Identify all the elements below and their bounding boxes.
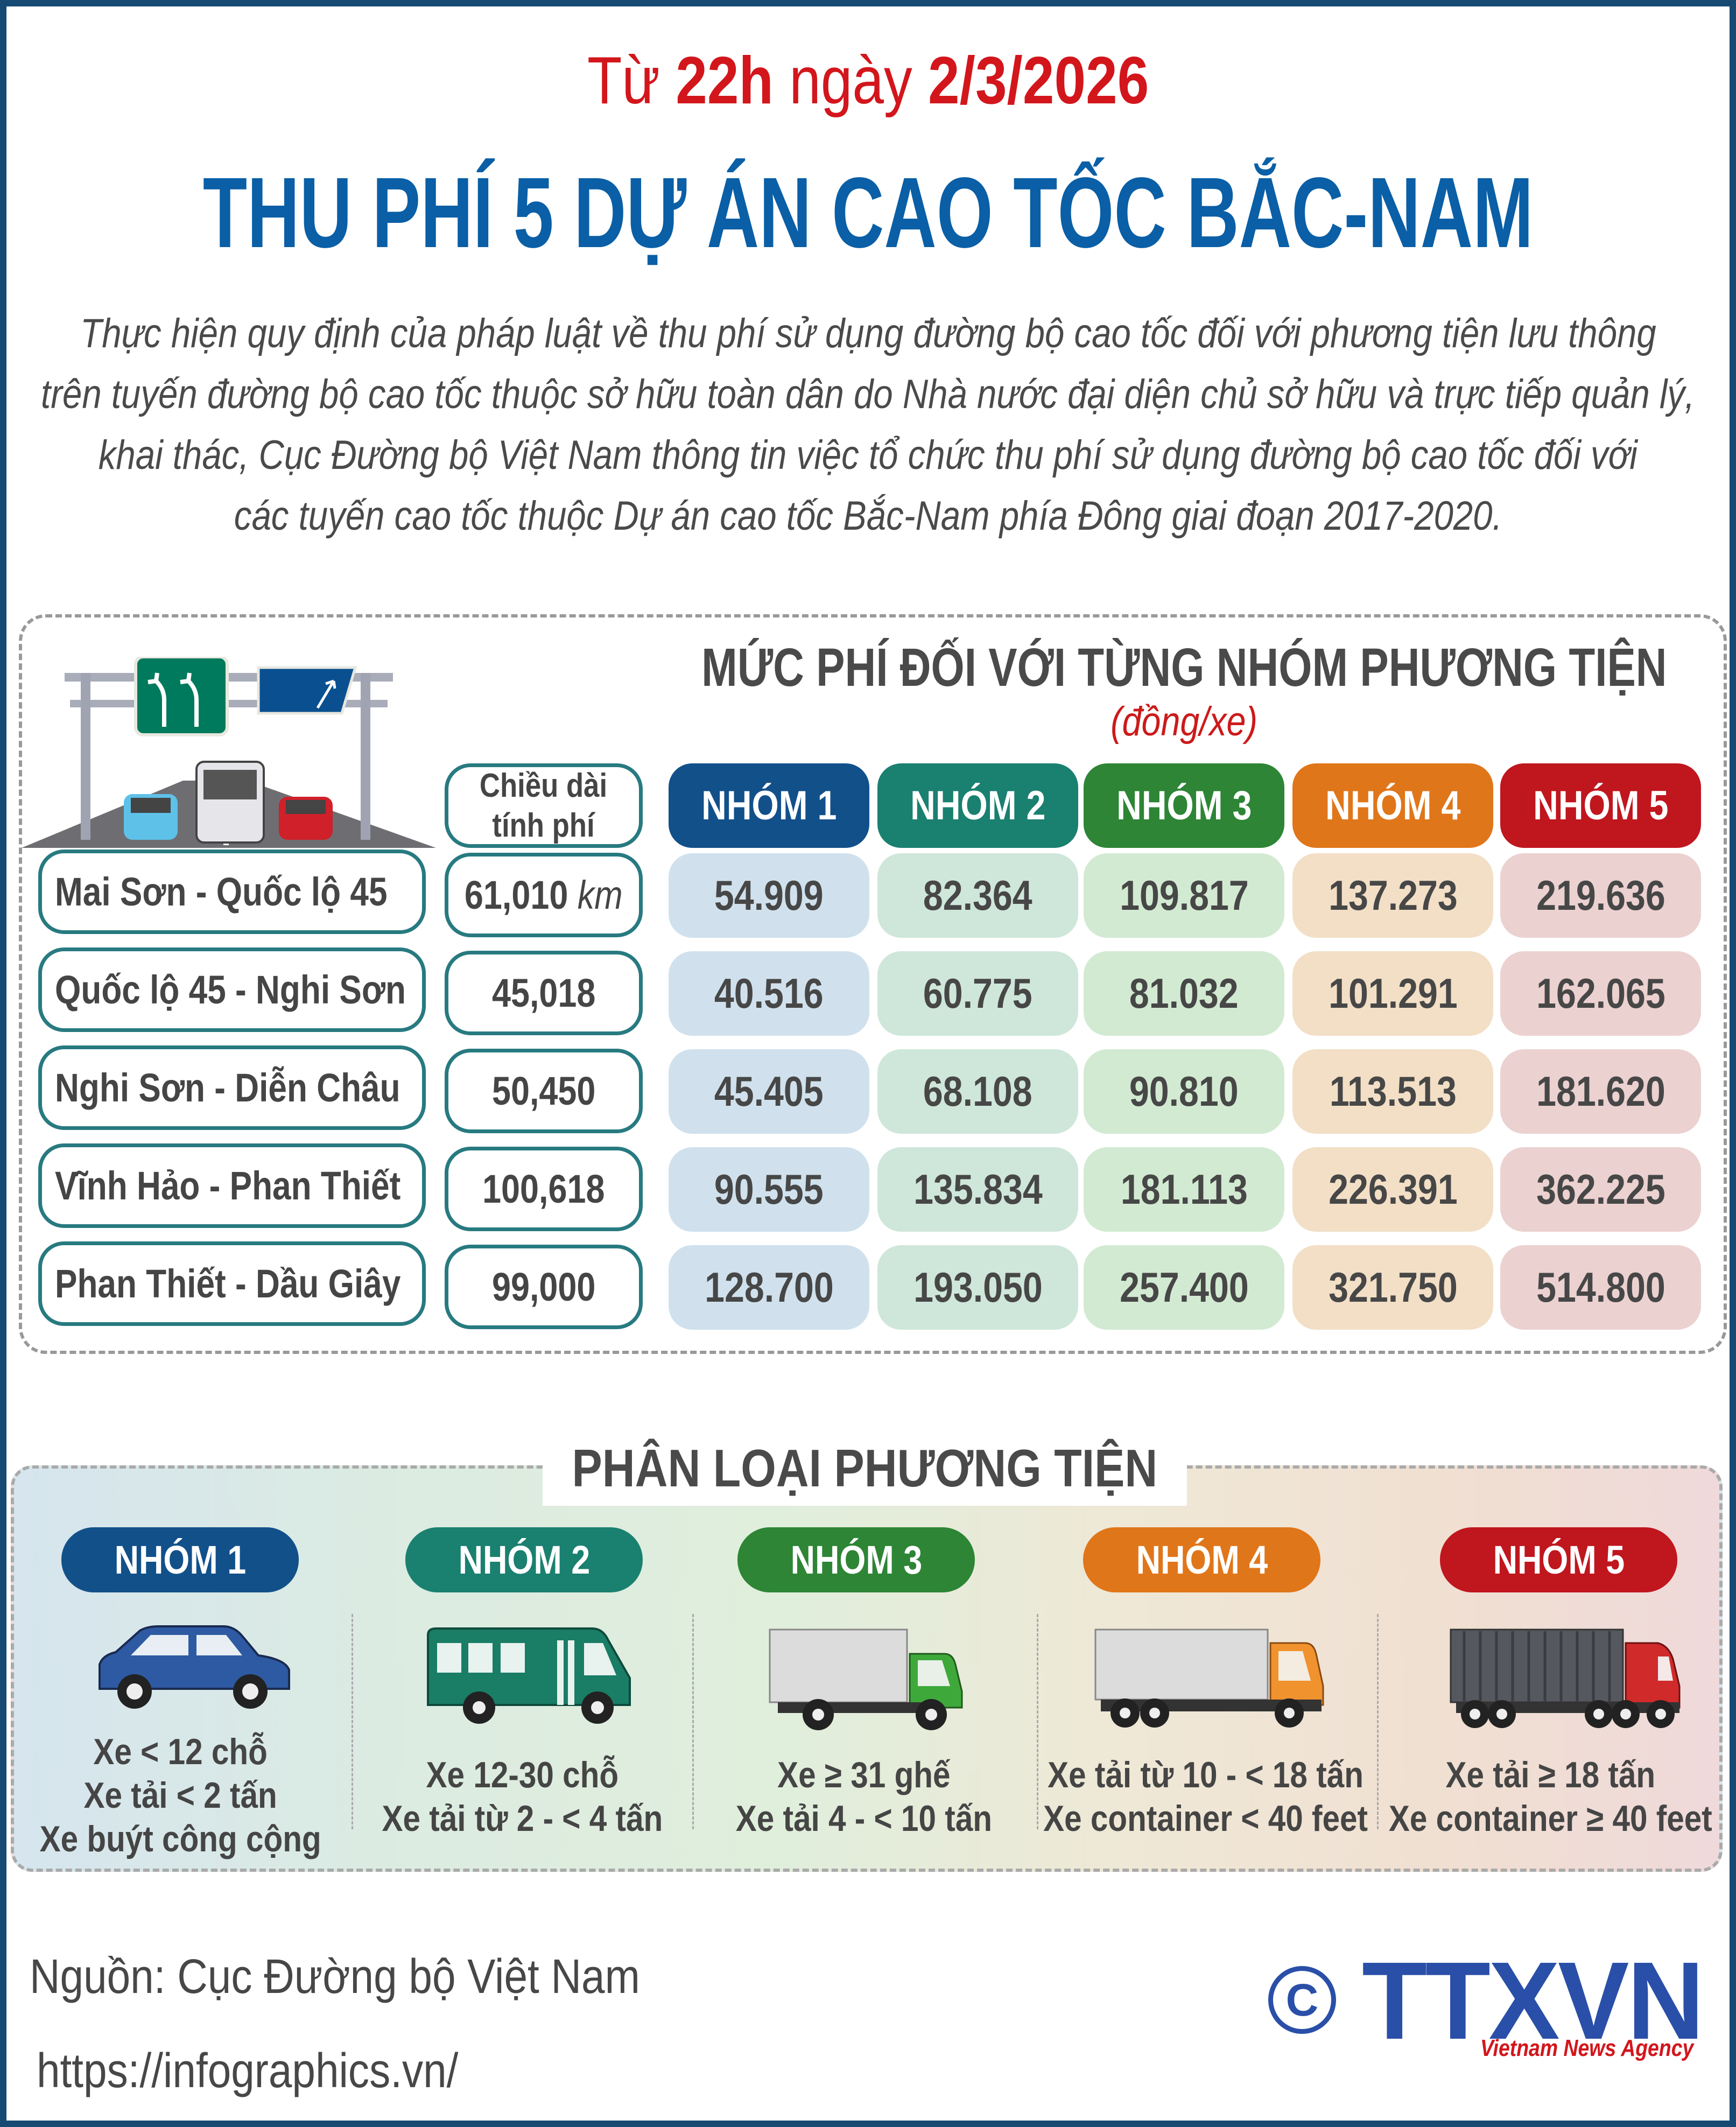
row: Nghi Sơn - Diễn Châu: 50,450	[492, 1069, 595, 1113]
row: Phan Thiết - Dầu Giây: Phan Thiết - Dầu Giây	[55, 1261, 400, 1306]
panel: toll fee table	[19, 614, 1727, 1354]
header: group columns: NHÓM 5	[1533, 783, 1668, 829]
row: Mai Sơn - Quốc lộ 45: 109.817	[1120, 872, 1248, 919]
panel: vehicle classification	[11, 1465, 1723, 1872]
row: Phan Thiết - Dầu Giây: 193.050	[913, 1263, 1042, 1311]
group 4	[1039, 1527, 1373, 1861]
text: group 1 vehicles: Xe tải < 2 tấn	[83, 1775, 277, 1816]
icon: copyright	[1268, 1966, 1336, 2034]
row: Phan Thiết - Dầu Giây: 257.400	[1120, 1263, 1248, 1311]
icon: car	[99, 1625, 290, 1709]
row: Mai Sơn - Quốc lộ 45: Mai Sơn - Quốc lộ 45	[55, 869, 388, 914]
row: Vĩnh Hảo - Phan Thiết: Vĩnh Hảo - Phan Thiết	[55, 1163, 400, 1208]
row: Vĩnh Hảo - Phan Thiết: 100,618	[482, 1167, 605, 1211]
text: group 2 vehicles	[366, 1753, 678, 1841]
intro paragraph	[41, 311, 1695, 539]
row: Phan Thiết - Dầu Giây: 99,000	[492, 1265, 595, 1309]
row: Phan Thiết - Dầu Giây: 514.800	[1536, 1263, 1665, 1311]
row: Quốc lộ 45 - Nghi Sơn: Quốc lộ 45 - Nghi Sơn	[55, 967, 406, 1012]
icon: copyright: C	[1286, 1975, 1318, 2025]
text: group 1 vehicles: Xe < 12 chỗ	[93, 1731, 268, 1772]
text: group 4 vehicles: Xe container < 40 feet	[1044, 1798, 1368, 1839]
header: length: Chiều dài	[480, 767, 608, 804]
icon: highway gantry with cars	[22, 657, 436, 848]
icon: green truck	[767, 1627, 966, 1735]
row: Mai Sơn - Quốc lộ 45	[38, 850, 1701, 938]
row: Nghi Sơn - Diễn Châu: 90.810	[1129, 1068, 1239, 1115]
logo: TTXVN	[1265, 1954, 1706, 2062]
unit note: (đồng/xe)	[1111, 699, 1257, 744]
group 5: NHÓM 5	[1493, 1538, 1625, 1582]
header: group columns: NHÓM 3	[1116, 783, 1252, 829]
icon: container truck	[1448, 1627, 1685, 1735]
row: Vĩnh Hảo - Phan Thiết: 362.225	[1536, 1166, 1665, 1213]
text: group 1 vehicles: Xe buýt công cộng	[39, 1819, 321, 1859]
group 3: NHÓM 3	[790, 1538, 922, 1582]
row: Mai Sơn - Quốc lộ 45: 82.364	[923, 872, 1032, 919]
header: length: tính phí	[493, 806, 595, 844]
row: Phan Thiết - Dầu Giây	[38, 1241, 1701, 1330]
row: Mai Sơn - Quốc lộ 45: 137.273	[1329, 872, 1457, 919]
text: group 1 vehicles	[39, 1731, 321, 1859]
row: Mai Sơn - Quốc lộ 45: 61,010 km	[465, 873, 623, 917]
group 2	[382, 1527, 663, 1839]
main title: THU PHÍ 5 DỰ ÁN CAO TỐC BẮC-NAM	[203, 157, 1533, 268]
header: group columns	[669, 763, 1701, 848]
row: Nghi Sơn - Diễn Châu: Nghi Sơn - Diễn Châu	[55, 1065, 400, 1110]
group 1	[39, 1527, 321, 1859]
group 3	[700, 1527, 1028, 1861]
text: group 4 vehicles: Xe tải từ 10 - < 18 tấn	[1048, 1754, 1364, 1795]
url text: https://infographics.vn/	[37, 2044, 458, 2098]
intro paragraph: khai thác, Cục Đường bộ Việt Nam thông tin việc tổ chức thu phí sử dụng đường bộ cao tốc đối với	[99, 432, 1637, 478]
logo text: TTXVN	[1362, 1939, 1702, 2062]
row: Vĩnh Hảo - Phan Thiết	[38, 1143, 1701, 1232]
intro paragraph: trên tuyến đường bộ cao tốc thuộc sở hữu toàn dân do Nhà nước đại diện chủ sở hữu và trực tiếp quản lý,	[41, 371, 1695, 417]
date line: Từ 22h ngày 2/3/2026	[587, 44, 1149, 118]
header: group columns: NHÓM 2	[910, 783, 1045, 829]
row: Vĩnh Hảo - Phan Thiết: 181.113	[1120, 1166, 1248, 1213]
row: Vĩnh Hảo - Phan Thiết: 90.555	[714, 1166, 824, 1213]
row: Quốc lộ 45 - Nghi Sơn	[38, 947, 1701, 1036]
text: group 5 vehicles: Xe container ≥ 40 feet	[1389, 1798, 1712, 1839]
icon: bus	[425, 1624, 635, 1726]
row: Nghi Sơn - Diễn Châu: 45.405	[714, 1068, 824, 1115]
group 2: NHÓM 2	[458, 1538, 590, 1582]
text: group 5 vehicles	[1381, 1753, 1720, 1841]
header: length	[445, 763, 643, 848]
row: Quốc lộ 45 - Nghi Sơn: 45,018	[492, 971, 595, 1015]
row: Quốc lộ 45 - Nghi Sơn: 101.291	[1329, 970, 1457, 1017]
row: Nghi Sơn - Diễn Châu: 68.108	[923, 1068, 1032, 1115]
row: Quốc lộ 45 - Nghi Sơn: 60.775	[923, 970, 1032, 1017]
text: group 2 vehicles: Xe 12-30 chỗ	[426, 1754, 619, 1795]
row: Nghi Sơn - Diễn Châu	[38, 1045, 1701, 1134]
tagline: Vietnam News Agency	[1480, 2035, 1693, 2061]
icon: orange truck	[1093, 1627, 1330, 1735]
group 1: NHÓM 1	[114, 1538, 246, 1582]
heading: fee per group: MỨC PHÍ ĐỐI VỚI TỪNG NHÓM PHƯƠNG TIỆN	[701, 637, 1667, 698]
text: group 3 vehicles: Xe ≥ 31 ghế	[777, 1754, 951, 1795]
intro paragraph: Thực hiện quy định của pháp luật về thu phí sử dụng đường bộ cao tốc đối với phương tiện lưu thông	[80, 311, 1656, 356]
text: group 3 vehicles	[700, 1753, 1028, 1841]
row: Quốc lộ 45 - Nghi Sơn: 40.516	[714, 970, 824, 1017]
row: Mai Sơn - Quốc lộ 45: 54.909	[714, 872, 824, 919]
row: Nghi Sơn - Diễn Châu: 113.513	[1329, 1068, 1457, 1115]
row: Quốc lộ 45 - Nghi Sơn: 162.065	[1536, 970, 1665, 1017]
row: Quốc lộ 45 - Nghi Sơn: 81.032	[1129, 970, 1239, 1017]
header: group columns: NHÓM 4	[1325, 783, 1460, 829]
source text: Nguồn: Cục Đường bộ Việt Nam	[30, 1950, 640, 2004]
row: Vĩnh Hảo - Phan Thiết: 135.834	[913, 1166, 1042, 1213]
row: Mai Sơn - Quốc lộ 45: 219.636	[1536, 872, 1665, 919]
text: group 4 vehicles	[1039, 1753, 1373, 1841]
text: group 2 vehicles: Xe tải từ 2 - < 4 tấn	[382, 1798, 663, 1839]
header: group columns: NHÓM 1	[701, 783, 837, 829]
text: group 5 vehicles: Xe tải ≥ 18 tấn	[1445, 1754, 1655, 1795]
group 4: NHÓM 4	[1136, 1538, 1268, 1582]
row: Phan Thiết - Dầu Giây: 128.700	[705, 1263, 833, 1311]
heading: vehicle classification: PHÂN LOẠI PHƯƠNG TIỆN	[572, 1438, 1157, 1498]
row: Vĩnh Hảo - Phan Thiết: 226.391	[1329, 1166, 1457, 1213]
row: Nghi Sơn - Diễn Châu: 181.620	[1536, 1068, 1665, 1115]
row: Phan Thiết - Dầu Giây: 321.750	[1329, 1263, 1457, 1311]
intro paragraph: các tuyến cao tốc thuộc Dự án cao tốc Bắc-Nam phía Đông giai đoạn 2017-2020.	[234, 493, 1502, 539]
group 5	[1381, 1527, 1720, 1861]
text: group 3 vehicles: Xe tải 4 - < 10 tấn	[736, 1798, 992, 1839]
